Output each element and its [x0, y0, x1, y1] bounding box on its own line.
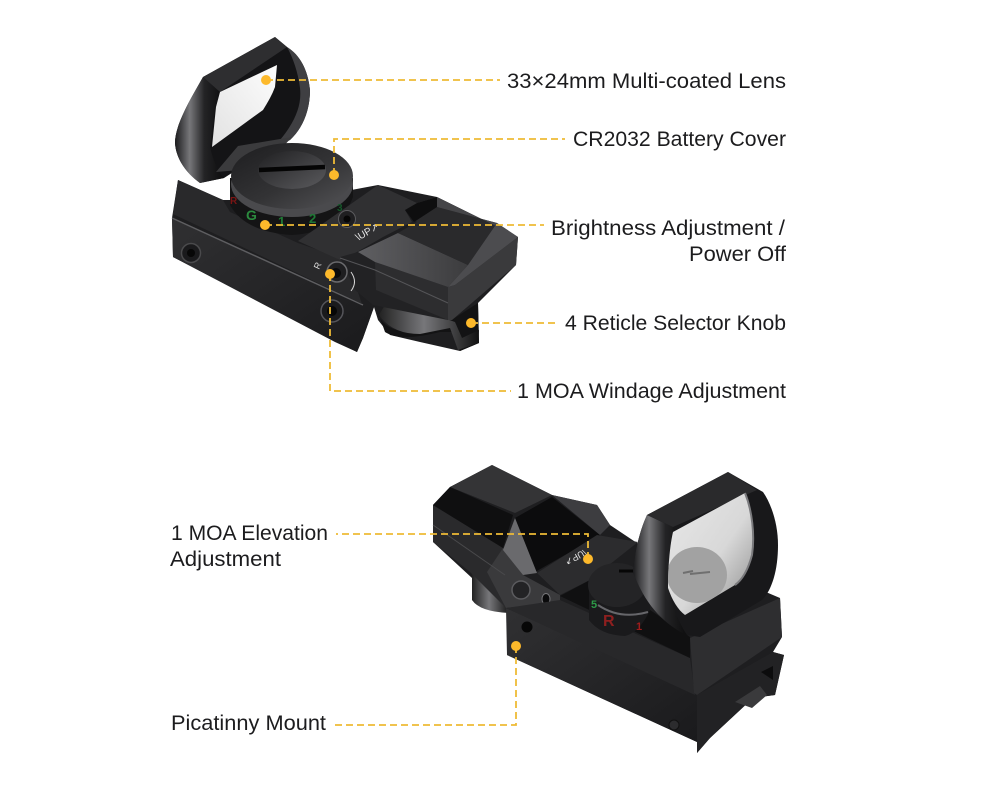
label: brightness adjustment: Brightness Adjustment /	[551, 217, 785, 240]
leader: elevation adjustment	[336, 534, 593, 564]
turret, rear view: 1	[636, 621, 642, 633]
label: elevation adjustment	[170, 522, 328, 571]
label: reticle selector knob: 4 Reticle Selector Knob	[565, 312, 786, 335]
upper block, rear view	[506, 580, 782, 695]
leader: multi-coated lens	[261, 75, 500, 85]
label: elevation adjustment: 1 MOA Elevation	[171, 522, 328, 545]
hood and lens, rear view	[633, 472, 778, 637]
battery and brightness turret: 2	[309, 211, 316, 226]
label: picatinny mount: Picatinny Mount	[171, 712, 326, 735]
label: elevation adjustment: Adjustment	[170, 548, 281, 571]
turret, rear view: 5	[591, 599, 597, 611]
reticle knob, rear view	[472, 572, 510, 613]
label: battery cover: CR2032 Battery Cover	[573, 128, 786, 151]
illustration: red dot sight, rear view	[433, 465, 784, 753]
label: lens: 33×24mm Multi-coated Lens	[507, 70, 786, 93]
lower base and mount block	[506, 608, 784, 753]
top plate with UP marking	[298, 185, 417, 260]
reticle knob under the housing	[378, 303, 479, 351]
mount rail	[172, 218, 374, 352]
battery and brightness turret: R	[230, 196, 238, 207]
top plate with UP marking: \UP↗	[354, 222, 381, 244]
hood	[175, 37, 310, 183]
UP marking, rear view: \UP↗	[563, 547, 588, 567]
battery and brightness turret: 3	[337, 203, 343, 214]
windage adjustment screw: R	[312, 260, 324, 271]
leader: battery cover	[329, 139, 565, 180]
leader: windage adjustment	[325, 269, 511, 391]
battery cover slot	[259, 167, 325, 170]
battery and brightness turret: 1	[278, 214, 285, 229]
battery and brightness turret	[230, 143, 353, 235]
label: brightness adjustment	[551, 217, 786, 266]
illustration: red dot sight, top view	[172, 37, 518, 352]
silhouette	[433, 465, 784, 753]
leader: reticle selector knob	[466, 318, 557, 328]
brightness scale: G	[246, 207, 257, 223]
windage adjustment screw	[312, 260, 354, 291]
label: windage adjustment: 1 MOA Windage Adjustment	[517, 380, 786, 403]
leader: brightness adjustment	[260, 220, 544, 230]
upper block	[173, 180, 362, 304]
label: brightness adjustment: Power Off	[689, 243, 786, 266]
turret, rear view	[588, 563, 650, 636]
turret, rear view: R	[603, 613, 615, 630]
housing, rear view	[433, 465, 638, 608]
optical housing	[340, 197, 518, 320]
leader: picatinny mount	[334, 641, 521, 725]
silhouette	[172, 180, 518, 352]
